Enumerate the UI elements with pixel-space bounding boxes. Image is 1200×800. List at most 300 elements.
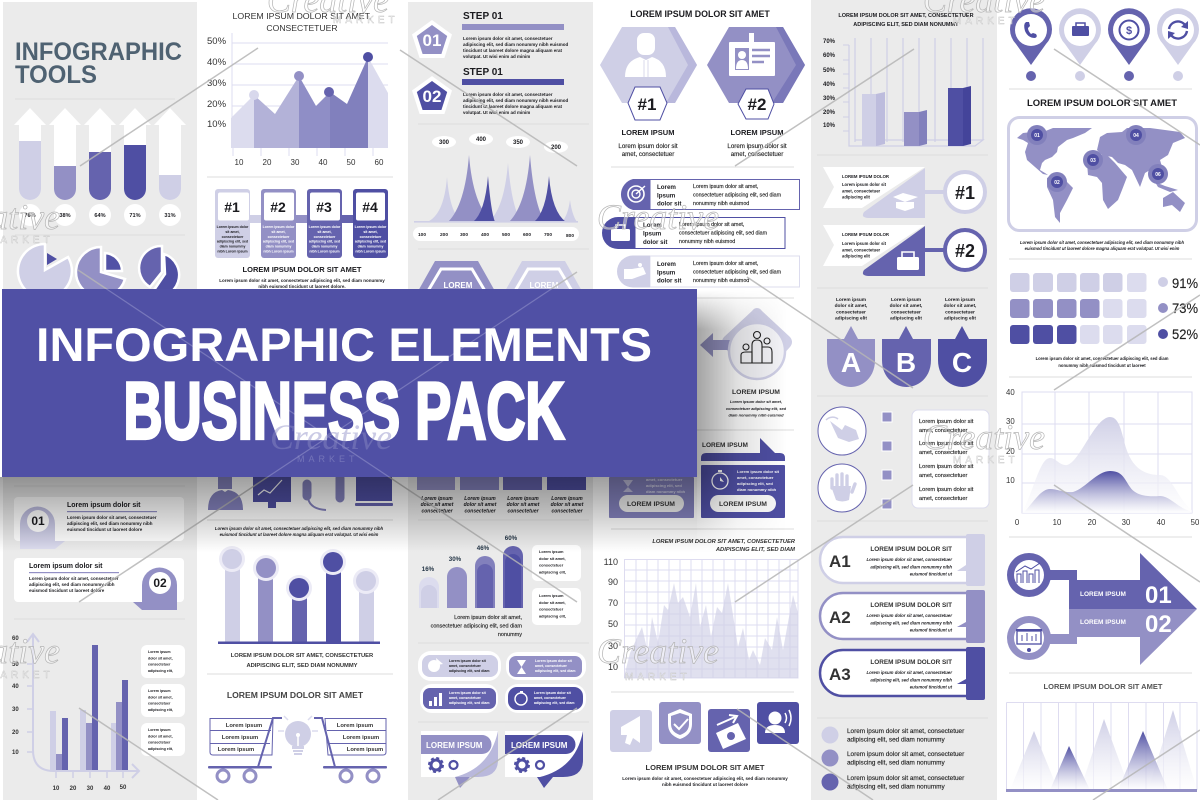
grouped bar chart: 40	[12, 684, 19, 690]
banner	[2, 289, 697, 477]
world map: 04	[1133, 133, 1139, 139]
icon pills: amet, consectetuer	[535, 664, 568, 668]
panel: bottom right charts	[997, 377, 1200, 800]
peak chart: 300	[439, 140, 450, 146]
chart notes: dolor sit amet,	[148, 656, 173, 660]
chart heading: ADIPISCING ELIT, SED DIAM NONUMMY	[853, 22, 959, 28]
area chart: 20%	[207, 99, 227, 110]
card A3: A3	[829, 665, 851, 684]
column chart notes: consectetuer	[539, 563, 564, 568]
lightbulb icon	[278, 716, 318, 755]
callout cards: Lorem ipsum dolor sit	[737, 469, 780, 474]
step cards #1 to #4: consectetuer	[222, 235, 244, 239]
percentage squares: Lorem ipsum dolor sit amet, consectetuer adipiscing elit, sed diam	[1036, 356, 1169, 361]
right shopping cart: Lorem ipsum	[337, 723, 373, 729]
watermark marks: MARKET	[625, 672, 691, 683]
step cards #1 to #4: adipiscing elit, sed	[355, 240, 386, 244]
shields A B C: adipiscing elit	[890, 316, 922, 322]
icon tiles caption	[622, 763, 788, 787]
icon tiles with captions: Lorem ipsum	[421, 496, 453, 502]
card A3: adipiscing elit, sed diam nonummy nibh	[870, 677, 952, 682]
smooth area chart: 10	[1006, 476, 1015, 485]
lollipop caption: LOREM IPSUM DOLOR SIT AMET, CONSECTETUER	[231, 653, 374, 659]
card 01: euismod tincidunt ut laoreet dolore	[67, 527, 143, 532]
peak chart: 100	[418, 232, 426, 238]
map pin icons: $	[1126, 25, 1132, 37]
list row: briefcase: Lorem	[643, 222, 662, 229]
world map: 06	[1155, 172, 1161, 178]
card A2: LOREM IPSUM DOLOR SIT	[870, 602, 952, 609]
list row: hand: nonummy nibh euismod	[693, 278, 749, 284]
icon tiles with captions: dolor sit amet	[464, 502, 497, 508]
gesture text box: amet, consectetuer	[919, 473, 967, 479]
callout cards: diam nonummy nibh	[646, 489, 686, 494]
peak chart: 300	[460, 232, 468, 238]
smooth area chart: 10	[1053, 518, 1062, 527]
icon tiles caption: nibh euismod tincidunt ut laoreet dolore	[662, 782, 748, 787]
list row: target: Lorem ipsum dolor sit amet,	[693, 184, 758, 190]
line area heading: ADIPISCING ELIT, SED DIAM	[715, 547, 795, 553]
step cards #1 to #4: nibh Lorem ipsum	[309, 250, 340, 254]
icon tile: megaphone	[610, 710, 652, 752]
icon tiles with captions	[417, 477, 586, 514]
grid area chart: 50	[608, 619, 618, 629]
list row: hand	[617, 256, 800, 288]
gesture text box: amet, consectetuer	[919, 428, 967, 434]
speech bubble 2 with gears: LOREM IPSUM	[511, 741, 568, 750]
3d bar chart: 10%	[823, 123, 836, 129]
grid area chart	[604, 557, 798, 678]
icon tiles with captions: consectetuer	[507, 508, 540, 514]
icon row caption: Lorem ipsum dolor sit amet, consectetuer adipiscing elit, sed diam nonummy nibh	[215, 526, 384, 531]
business icon row	[208, 477, 393, 510]
card A1: adipiscing elit, sed diam nonummy nibh	[870, 564, 952, 569]
peak chart: 500	[502, 232, 510, 238]
lollipop caption: ADIPISCING ELIT, SED DIAM NONUMMY	[246, 663, 358, 669]
percent column chart: 30%	[449, 556, 462, 563]
world map: 02	[1054, 180, 1060, 186]
3d bar chart: 30%	[823, 96, 836, 102]
map heading: LOREM IPSUM DOLOR SIT AMET	[1027, 98, 1178, 108]
step 01: tincidunt ut laoreet dolore magna aliquam erat	[463, 48, 563, 53]
gesture text box: Lorem ipsum dolor sit	[919, 487, 974, 493]
icon pills: Lorem ipsum dolor sit	[534, 691, 572, 695]
icon tile: shield	[659, 702, 701, 744]
step cards #1 to #4: #4	[362, 199, 378, 215]
step 02: volutpat. Ut wisi enim ad minim	[463, 110, 530, 115]
right shopping cart: Lorem ipsum	[347, 747, 383, 753]
step 01: Lorem ipsum dolor sit amet, consectetuer	[463, 36, 553, 41]
area chart: 60	[375, 158, 384, 167]
callout cards: amet, consectetuer	[646, 477, 683, 482]
list row: hand: consectetuer adipiscing elit, sed diam	[693, 269, 782, 275]
list row: hand: Lorem ipsum dolor sit amet,	[693, 261, 758, 267]
title: infographic tools	[15, 38, 182, 89]
legend list: Lorem ipsum dolor sit amet, consectetuer	[847, 728, 965, 735]
speech bubble 1 with gears: LOREM IPSUM	[426, 741, 483, 750]
column chart notes: consectetuer	[539, 607, 564, 612]
ribbon #1	[823, 167, 985, 218]
steps caption: Lorem ipsum dolor sit amet, consectetuer adipiscing elit, sed diam nonummy	[219, 278, 385, 283]
people badge caption: Lorem ipsum dolor sit amet,	[730, 399, 782, 404]
profile captions: amet, consectetuer	[731, 151, 783, 158]
arrow thermometer chart: 31%	[164, 213, 176, 219]
step cards #1 to #4: adipiscing elit, sed	[217, 240, 248, 244]
3d bar chart: 20%	[823, 110, 836, 116]
step cards #1 to #4: sit amet,	[225, 230, 240, 234]
card 02: 02	[153, 576, 167, 590]
card 02	[14, 558, 184, 610]
ribbon #1: #1	[955, 183, 975, 203]
profile captions: Lorem ipsum dolor sit	[727, 143, 787, 150]
ribbon #2: LOREM IPSUM DOLOR	[842, 232, 890, 237]
hexagon #1 with person	[600, 27, 697, 120]
gesture circles	[818, 407, 866, 512]
arrow thermometer chart: 71%	[129, 213, 141, 219]
card A1	[820, 534, 985, 586]
double arrow 01 02: LOREM IPSUM	[1080, 591, 1126, 598]
hexagon #2 with id badge	[707, 27, 805, 119]
percentage squares	[1010, 273, 1198, 368]
step 01: 01	[423, 31, 441, 50]
step cards #1 to #4: #1	[224, 199, 240, 215]
left shopping cart: Lorem ipsum	[226, 723, 262, 729]
step cards #1 to #4: nibh Lorem ipsum	[217, 250, 248, 254]
panel: hexagon profiles and list rows	[593, 0, 811, 298]
hexagon #2 with id badge: #2	[748, 95, 766, 114]
area chart: 40%	[207, 57, 227, 68]
peak chart: 200	[440, 232, 448, 238]
percent column chart: 16%	[422, 566, 435, 573]
percentage squares: 73%	[1172, 301, 1198, 316]
grid area chart: 10	[608, 662, 618, 672]
shields A B C: adipiscing elit	[835, 316, 867, 322]
line area heading	[652, 539, 796, 553]
left shopping cart: Lorem ipsum	[218, 747, 254, 753]
column chart notes: dolor sit amet,	[539, 556, 566, 561]
hexagon badges: LOREM	[444, 281, 473, 290]
list row: hand: Lorem	[657, 261, 676, 268]
world map: 03	[1090, 158, 1096, 164]
watermark marks: MARKET	[953, 455, 1019, 466]
chart heading	[838, 13, 974, 28]
panel: map column	[997, 0, 1200, 377]
lollipop caption	[231, 653, 374, 669]
area chart: 30%	[207, 78, 227, 89]
chart heading: LOREM IPSUM DOLOR SIT AMET,	[232, 11, 372, 21]
banner watermark: MARKET	[297, 454, 359, 464]
callout cards	[609, 438, 785, 518]
list row: target: Lorem	[657, 184, 676, 191]
arrow thermometer chart: 64%	[94, 213, 106, 219]
icon tiles with captions: consectetuer	[551, 508, 584, 514]
step 02: STEP 01	[463, 67, 503, 78]
step 02: adipiscing elit, sed diam nonummy nibh euismod	[463, 98, 569, 103]
column chart caption: nonummy	[498, 632, 522, 638]
shields A B C: dolor sit amet,	[944, 303, 977, 309]
line area heading: LOREM IPSUM DOLOR SIT AMET, CONSECTETUER	[652, 539, 796, 545]
icon tile: money	[708, 709, 750, 752]
title: infographic tools: TOOLS	[15, 61, 97, 89]
card A2	[820, 590, 985, 643]
step cards #1 to #4: adipiscing elit, sed	[263, 240, 294, 244]
watermark marks: Creative	[597, 197, 719, 237]
banner shadow	[0, 290, 787, 552]
list row: briefcase: consectetuer adipiscing elit, sed diam	[679, 230, 768, 236]
smooth area chart: 20	[1088, 518, 1097, 527]
card 02: Lorem ipsum dolor sit amet, consectetuer	[29, 576, 119, 581]
left shopping cart	[208, 718, 282, 782]
3d bar chart: 70%	[823, 39, 836, 45]
area chart: 10%	[207, 119, 227, 130]
ribbon #2	[823, 225, 985, 276]
step cards #1 to #4: sit amet,	[363, 230, 378, 234]
peak chart: 200	[551, 145, 562, 151]
chart heading: CONSECTETUER	[266, 23, 338, 33]
profile captions: LOREM IPSUM	[622, 128, 674, 137]
step 02: 02	[423, 87, 441, 106]
people badge caption: LOREM IPSUM	[732, 389, 780, 396]
grouped bar chart: 50	[12, 662, 19, 668]
grouped bar chart	[12, 634, 139, 792]
step 02	[412, 67, 569, 115]
icon pills: Lorem ipsum dolor sit	[449, 691, 487, 695]
ribbon #1: Lorem ipsum dolor sit	[842, 182, 887, 187]
right shopping cart: Lorem ipsum	[343, 735, 379, 741]
grouped bar chart: 30	[87, 786, 94, 792]
chart notes	[141, 645, 185, 756]
card 01: 01	[31, 514, 45, 528]
grouped bar chart: 20	[70, 786, 77, 792]
panel: bottom second column	[197, 477, 407, 800]
hexagon badges	[413, 261, 587, 300]
percent column chart: 60%	[505, 535, 518, 542]
people badge caption: consectetuer adipiscing elit, sed	[726, 406, 787, 411]
peak chart	[413, 133, 579, 241]
icon pills: amet, consectetuer	[534, 696, 567, 700]
watermark marks: Creative	[923, 417, 1045, 457]
percentage squares: 52%	[1172, 327, 1198, 342]
grouped bar chart: 50	[120, 785, 127, 791]
chart notes: adipiscing elit,	[148, 747, 173, 751]
3d bar chart	[823, 38, 983, 146]
peak chart: 600	[523, 232, 531, 238]
step 02: Lorem ipsum dolor sit amet, consectetuer	[463, 92, 553, 97]
map caption: Lorem ipsum dolor sit amet, consectetuer adipiscing elit, sed diam nonummy nibh	[1020, 240, 1184, 245]
step cards #1 to #4: nibh Lorem ipsum	[263, 250, 294, 254]
ribbon #2: #2	[955, 241, 975, 261]
icon pills: amet, consectetuer	[449, 664, 482, 668]
3d bar chart: 50%	[823, 68, 836, 74]
card A2: adipiscing elit, sed diam nonummy nibh	[870, 620, 952, 625]
shields A B C: dolor sit amet,	[890, 303, 923, 309]
step cards #1 to #4: Lorem ipsum dolor	[355, 225, 387, 229]
chart notes: Lorem ipsum	[148, 650, 171, 654]
icon pills: amet, consectetuer	[449, 696, 482, 700]
speech bubble 1 with gears	[421, 731, 498, 788]
step cards #1 to #4: consectetuer	[360, 235, 382, 239]
double arrow 01 02	[1007, 553, 1197, 665]
smooth area chart	[1006, 388, 1200, 527]
grid area chart: 110	[604, 557, 618, 567]
column chart caption	[431, 615, 522, 638]
watermark marks: MARKET	[953, 16, 1019, 27]
title: infographic tools: INFOGRAPHIC	[15, 38, 182, 66]
icon pills: Lorem ipsum dolor sit	[449, 659, 487, 663]
list row: briefcase: dolor sit	[643, 239, 667, 246]
legend list: adipiscing elit, sed diam nonummy	[847, 736, 945, 743]
ribbon #2: adipiscing elit	[842, 254, 871, 259]
step cards #1 to #4	[215, 189, 388, 258]
world map	[1008, 118, 1196, 230]
profile captions: amet, consectetuer	[622, 151, 674, 158]
card A3	[820, 647, 985, 700]
icon tiles with captions: dolor sit amet	[421, 502, 454, 508]
percentage squares: 91%	[1172, 276, 1198, 291]
shields A B C: dolor sit amet,	[835, 303, 868, 309]
area chart: 40	[319, 158, 328, 167]
shields A B C: A	[841, 347, 861, 378]
callout cards: LOREM IPSUM	[627, 501, 675, 508]
chart notes: consectetuer	[148, 663, 171, 667]
grouped bar chart: 10	[53, 786, 60, 792]
panel: bottom third column	[408, 477, 593, 800]
map caption	[1020, 240, 1184, 251]
list row: briefcase: Lorem ipsum dolor sit amet,	[679, 222, 744, 228]
area chart: 50%	[207, 36, 227, 47]
hexagon #1 with person: #1	[638, 95, 656, 114]
legend list: Lorem ipsum dolor sit amet, consectetuer	[847, 751, 965, 758]
step 01: adipiscing elit, sed diam nonummy nibh euismod	[463, 42, 569, 47]
gesture text box: Lorem ipsum dolor sit	[919, 441, 974, 447]
watermark marks	[0, 0, 1045, 683]
shields A B C: B	[896, 347, 916, 378]
step cards #1 to #4: Lorem ipsum dolor	[263, 225, 295, 229]
list row: target: consectetuer adipiscing elit, sed diam	[693, 192, 782, 198]
card A2: Lorem ipsum dolor sit amet, consectetuer	[867, 613, 952, 618]
panel: steps and peak chart	[408, 2, 593, 300]
people badge caption: diam nonummy nibh euismod	[728, 413, 784, 418]
shields A B C: consectetuer	[945, 309, 975, 315]
list row: target: nonummy nibh euismod	[693, 201, 749, 207]
steps caption: LOREM IPSUM DOLOR SIT AMET	[243, 265, 362, 274]
step cards #1 to #4: sit amet,	[317, 230, 332, 234]
chart notes: adipiscing elit,	[148, 708, 173, 712]
area chart: 50	[347, 158, 356, 167]
grouped bar chart: 40	[104, 786, 111, 792]
grouped bar chart: 30	[12, 707, 19, 713]
shields A B C: Lorem ipsum	[891, 297, 921, 303]
card 02: Lorem ipsum dolor sit	[29, 563, 103, 570]
column chart notes	[532, 545, 581, 625]
card A1: Lorem ipsum dolor sit amet, consectetuer	[867, 557, 952, 562]
gesture text box: amet, consectetuer	[919, 496, 967, 502]
list row: target	[621, 179, 800, 210]
banner title line 1: INFOGRAPHIC ELEMENTS	[36, 318, 652, 371]
heading: LOREM IPSUM DOLOR SIT AMET	[630, 9, 770, 19]
steps caption	[219, 265, 385, 289]
card 02: euismod tincidunt ut laoreet dolore	[29, 588, 105, 593]
banner watermark: Creative	[270, 417, 392, 457]
area chart: 10	[235, 158, 244, 167]
step 02: tincidunt ut laoreet dolore magna aliquam erat	[463, 104, 563, 109]
shields A B C: adipiscing elit	[944, 316, 976, 322]
icon pills: adipiscing elit, sed diam	[449, 669, 489, 673]
chart notes: consectetuer	[148, 702, 171, 706]
step cards #1 to #4: Lorem ipsum dolor	[217, 225, 249, 229]
percent column chart	[419, 535, 523, 608]
column chart notes: Lorem ipsum	[539, 593, 564, 598]
peak chart: 700	[544, 232, 552, 238]
ribbon #2: Lorem ipsum dolor sit	[842, 241, 887, 246]
steps caption: nibh euismod tincidunt ut laoreet dolore.	[258, 284, 346, 289]
3d bar chart: 40%	[823, 82, 836, 88]
column chart notes: dolor sit amet,	[539, 600, 566, 605]
left shopping cart: Lorem ipsum	[222, 735, 258, 741]
column chart notes: Lorem ipsum	[539, 549, 564, 554]
icon tile: speaker	[757, 702, 799, 744]
grid area chart: 70	[608, 598, 618, 608]
triangle gradient chart	[1006, 702, 1197, 792]
chart heading	[232, 11, 372, 33]
column chart notes: adipiscing elit,	[539, 569, 566, 574]
icon tiles with captions: Lorem ipsum	[551, 496, 583, 502]
card 01	[14, 497, 184, 549]
card A3: Lorem ipsum dolor sit amet, consectetuer	[867, 670, 952, 675]
grouped bar chart: 10	[12, 750, 19, 756]
chart notes: dolor sit amet,	[148, 695, 173, 699]
callout cards: amet, consectetuer	[737, 475, 774, 480]
arrow thermometer chart	[14, 108, 186, 226]
peak chart: 400	[476, 137, 487, 143]
percentage squares: nonummy nibh euismod tincidunt ut laoreet	[1058, 363, 1146, 368]
area chart: 30	[291, 158, 300, 167]
callout cards: adipiscing elit, sed	[737, 481, 773, 486]
pie charts	[18, 244, 179, 298]
list row: briefcase	[602, 217, 785, 249]
icon pills	[418, 651, 586, 713]
peak chart: 800	[566, 233, 574, 239]
step cards #1 to #4: sit amet,	[271, 230, 286, 234]
arrow thermometer chart: 76%	[24, 213, 36, 219]
map caption: euismod tincidunt ut laoreet dolore magna aliquam erat volutpat. Ut wisi enim	[1025, 246, 1180, 251]
peak chart: 350	[513, 140, 524, 146]
card A1: LOREM IPSUM DOLOR SIT	[870, 546, 952, 553]
card 01: adipiscing elit, sed diam nonummy nibh	[67, 521, 153, 526]
icon pills: adipiscing elit, sed diam	[535, 669, 575, 673]
watermark marks: MARKET	[333, 15, 399, 26]
icon tiles with captions: consectetuer	[464, 508, 497, 514]
grouped bar chart: 60	[12, 636, 19, 642]
right shopping cart	[314, 718, 387, 782]
card A1: euismod tincidunt ut	[910, 572, 953, 577]
card 01: Lorem ipsum dolor sit amet, consectetuer	[67, 515, 157, 520]
people badge with arrow	[700, 308, 792, 379]
icon tiles with captions: Lorem ipsum	[507, 496, 539, 502]
callout cards: LOREM IPSUM	[702, 442, 748, 449]
smooth area chart: 30	[1122, 518, 1131, 527]
grouped bar chart: 20	[12, 730, 19, 736]
smooth area chart: 40	[1157, 518, 1166, 527]
chart notes: adipiscing elit,	[148, 669, 173, 673]
callout cards: diam nonummy nibh	[737, 487, 777, 492]
map pin icons	[1010, 8, 1199, 81]
peak chart: 400	[481, 232, 489, 238]
icon tiles caption: LOREM IPSUM DOLOR SIT AMET	[646, 763, 765, 772]
shields A B C: consectetuer	[836, 309, 866, 315]
callout cards: LOREM IPSUM	[719, 501, 767, 508]
connector squares	[882, 412, 892, 509]
